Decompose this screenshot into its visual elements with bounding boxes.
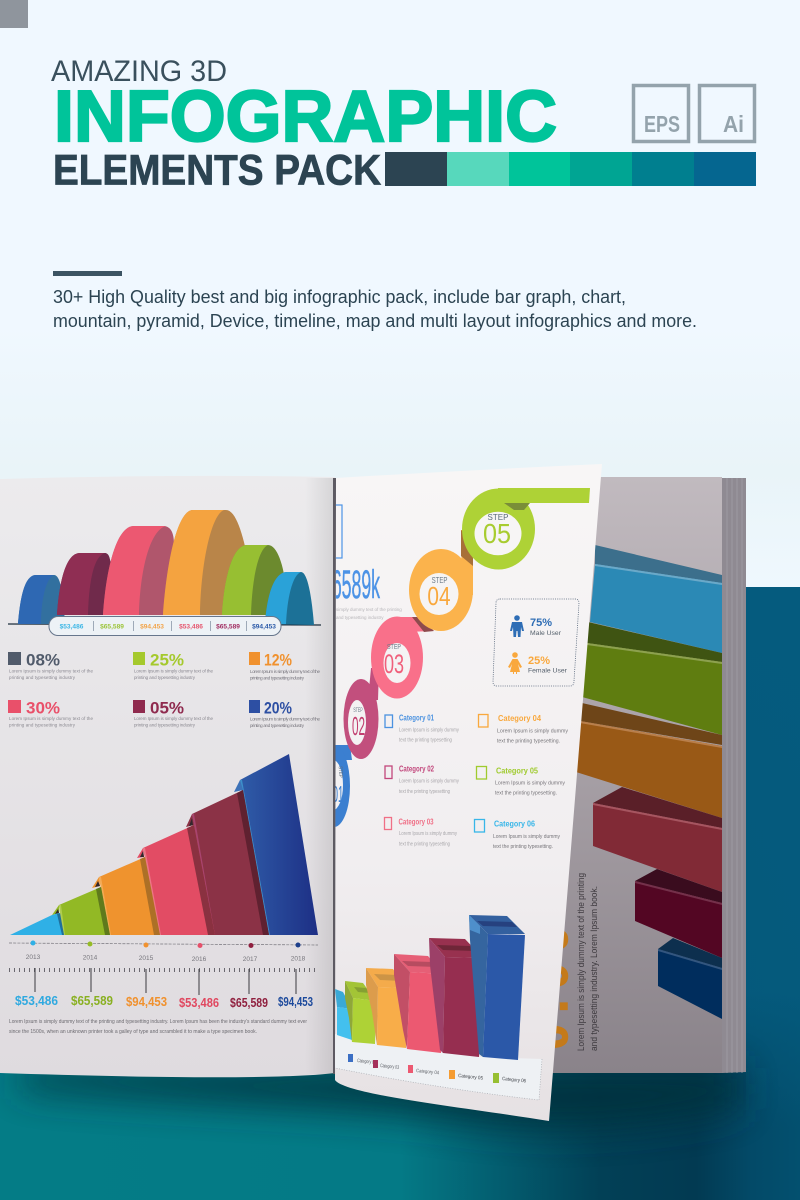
- intro text: mountain, pyramid, Device, timeline, map and multi layout infographics and more.: [53, 310, 697, 331]
- value pill: $94,453: [140, 624, 164, 630]
- stat: 25%: Lorem Ipsum is simply dummy text of the: [134, 668, 213, 674]
- band: navy: [658, 938, 722, 1019]
- male stat: 75%: [530, 617, 552, 629]
- category 04: [478, 714, 568, 744]
- female stat: [528, 656, 567, 672]
- step 05: STEP: [488, 513, 508, 522]
- book back page: [528, 477, 746, 1073]
- category 05: text the printing typesetting.: [495, 790, 557, 796]
- category 03: Category 03: [398, 818, 434, 826]
- year labels: 2015: [139, 955, 154, 962]
- stat: 12%: Lorem Ipsum is simply dummy text of the: [250, 669, 320, 674]
- stat grid: [8, 650, 320, 728]
- corner swatch: [0, 0, 28, 28]
- category 04: text the printing typesetting.: [497, 738, 560, 744]
- arch: blue: [18, 575, 65, 624]
- arch: pink: [103, 526, 174, 615]
- arch: maroon: [57, 553, 112, 615]
- female stat: 25%: [528, 655, 550, 667]
- stat: 20%: printing and typesetting industry: [250, 723, 305, 728]
- intro text: [53, 286, 697, 331]
- step 02: STEP: [353, 707, 363, 714]
- callout: 6589k: [336, 504, 402, 620]
- value row: $53,486: [179, 996, 219, 1010]
- value row: $53,486: [15, 994, 58, 1008]
- step 05: [462, 488, 590, 570]
- callout: 6589k: $6589k: [322, 563, 380, 607]
- ruler: [9, 968, 318, 995]
- legend item 02: [348, 1054, 373, 1064]
- user split panel: [493, 599, 579, 686]
- rotated caption: [576, 873, 599, 1051]
- stat: 25%: [133, 650, 213, 680]
- category 01: Category 01: [399, 714, 434, 722]
- step 03: [371, 616, 434, 698]
- bar: pink: [394, 954, 443, 1053]
- stat: 12%: printing and typesetting industry: [250, 676, 305, 680]
- right page flipping: [318, 464, 602, 1121]
- step 01: 01: [333, 781, 343, 807]
- arch: orange: [163, 510, 248, 615]
- legend item 03: Category 03: [380, 1063, 399, 1071]
- value row: $65,589: [71, 994, 113, 1008]
- category 03: [384, 818, 457, 848]
- icon: EPS file: EPS: [644, 111, 680, 137]
- band: blue: [590, 545, 722, 653]
- year labels: 2017: [243, 956, 258, 963]
- step 02: [344, 668, 379, 759]
- stat: 08%: Lorem Ipsum is simply dummy text of the: [9, 668, 93, 674]
- title line: elements pack: ELEMENTS PACK: [53, 146, 381, 194]
- category 03: text the printing typesetting: [399, 842, 450, 848]
- arch: cyan: [265, 572, 314, 625]
- accent rule: [53, 271, 122, 276]
- bar: cyan: [335, 989, 352, 1040]
- stat: 05%: printing and typesetting industry: [134, 722, 196, 728]
- baseline: [8, 624, 321, 625]
- legend item 02: Category 02: [357, 1058, 376, 1066]
- value pill: $53,486: [179, 624, 203, 630]
- step: cyan: [10, 913, 64, 935]
- body copy: [9, 1019, 307, 1035]
- body copy: since the 1500s, when an unknown printer took a galley of type and scrambled it to make a type specimen book.: [9, 1029, 257, 1035]
- rotated figure: 0.00: [528, 927, 577, 1049]
- page stack: [722, 478, 746, 1073]
- stat: 05%: [133, 698, 213, 728]
- category 05: [476, 766, 565, 796]
- category 06: text the printing typesetting.: [493, 844, 553, 850]
- callout: 6589k: and typesetting industry: [336, 615, 384, 620]
- category 02: Lorem Ipsum is simply dummy: [399, 778, 459, 784]
- category 03: Lorem Ipsum is simply dummy: [399, 831, 457, 837]
- category 02: Category 02: [399, 764, 434, 774]
- category 05: Lorem Ipsum is simply dummy: [495, 780, 565, 786]
- step 01: [335, 745, 352, 827]
- year labels: 2018: [291, 956, 306, 962]
- stat: 25%: 25%: [150, 650, 184, 670]
- value pill: $53,486: [60, 624, 84, 630]
- year labels: 2014: [83, 954, 98, 962]
- band: green: [582, 622, 722, 735]
- legend item 06: Category 06: [502, 1076, 526, 1085]
- band: red: [593, 787, 722, 892]
- title line: infographic: INFOGRAPHIC: [54, 77, 557, 157]
- category 01: text the printing typesetting: [399, 738, 452, 744]
- icon: male user: [510, 615, 524, 637]
- step 04: [409, 530, 473, 631]
- band: plum: [635, 869, 722, 958]
- timeline: [9, 940, 318, 963]
- value pill: [49, 616, 281, 636]
- value pill: $94,453: [252, 624, 276, 630]
- stair chart: [10, 754, 318, 935]
- arch: green: [222, 545, 286, 615]
- category 02: text the printing typesetting: [399, 789, 450, 795]
- bar: blue: [469, 915, 525, 1060]
- title line: amazing 3D: AMAZING 3D: [51, 55, 227, 88]
- stat: 20%: 20%: [264, 698, 292, 718]
- step 03: STEP: [387, 643, 401, 651]
- step 03: 03: [384, 648, 404, 679]
- category 06: Category 06: [494, 820, 535, 828]
- step 04: STEP: [432, 576, 448, 585]
- category 04: Category 04: [498, 714, 542, 723]
- step 04: 04: [427, 582, 451, 611]
- colour strip: [385, 152, 756, 186]
- stat: 25%: printing and typesetting industry: [134, 675, 196, 680]
- rotated caption: and typesetting industry. Lorem Ipsum book.: [589, 886, 599, 1051]
- legend item 04: Category 04: [416, 1068, 439, 1076]
- male stat: Male User: [530, 630, 562, 637]
- bar: maroon: [429, 938, 483, 1057]
- step: green: [52, 887, 110, 935]
- bar: green: [345, 981, 376, 1044]
- value row: $94,453: [278, 995, 313, 1009]
- step ribbon: [318, 488, 590, 827]
- band: orange: [576, 703, 722, 818]
- step: maroon: [186, 790, 269, 935]
- icon: EPS file: [634, 86, 688, 142]
- category 06: [474, 820, 560, 850]
- stat: 12%: [249, 650, 320, 680]
- category 01: Lorem Ipsum is simply dummy: [399, 728, 459, 734]
- stat: 08%: 08%: [26, 650, 60, 670]
- stat: 30%: 30%: [26, 698, 60, 718]
- rotated caption: Lorem Ipsum is simply dummy text of the printing: [576, 873, 586, 1051]
- step 01: STEP: [337, 766, 344, 778]
- step: pink: [137, 825, 215, 935]
- stat: 08%: printing and typesetting industry: [9, 675, 76, 680]
- female stat: Female User: [528, 668, 568, 674]
- category 05: Category 05: [496, 766, 539, 776]
- stat: 20%: Lorem Ipsum is simply dummy text of the: [250, 716, 320, 722]
- stat: 05%: 05%: [150, 698, 184, 718]
- arch chart: [8, 510, 321, 636]
- 3D bar chart: [335, 915, 525, 1060]
- icon: Ai file: Ai: [723, 111, 744, 137]
- year labels: [26, 954, 306, 963]
- year labels: 2013: [26, 954, 41, 961]
- category 01: [385, 714, 459, 744]
- value row: $94,453: [126, 995, 167, 1009]
- value pill: $65,589: [216, 624, 240, 630]
- stat: 08%: [8, 650, 93, 680]
- legend item 03: [373, 1060, 399, 1070]
- step: blue: [234, 754, 318, 935]
- stat: 20%: [249, 698, 320, 728]
- category 02: [385, 764, 459, 795]
- bar: orange: [366, 968, 407, 1048]
- category list: [384, 714, 568, 850]
- stat: 12%: 12%: [264, 650, 292, 670]
- left page: [0, 476, 336, 1077]
- intro text: 30+ High Quality best and big infographic pack, include bar graph, chart,: [53, 286, 626, 307]
- stat: 05%: Lorem Ipsum is simply dummy text of the: [134, 716, 213, 721]
- callout: 6589k: simply dummy text of the printing: [336, 607, 402, 612]
- category 04: Lorem Ipsum is simply dummy: [497, 728, 568, 734]
- legend item 06: [493, 1073, 526, 1083]
- male stat: [530, 618, 561, 635]
- category 06: Lorem Ipsum is simply dummy: [493, 834, 560, 840]
- legend panel: [335, 1034, 542, 1100]
- step: orange: [92, 857, 160, 935]
- icon: Ai file: [700, 86, 754, 142]
- value row: [15, 994, 313, 1010]
- stat: 30%: printing and typesetting industry: [9, 722, 76, 728]
- value pill: $65,589: [100, 624, 124, 630]
- legend item 05: Category 05: [458, 1073, 483, 1082]
- body copy: Lorem Ipsum is simply dummy text of the printing and typesetting industry. Lorem Ipsum has been the industry's standard dummy text ever: [9, 1019, 307, 1025]
- value row: $65,589: [230, 996, 268, 1010]
- title block: [51, 55, 557, 194]
- step 05: 05: [483, 518, 511, 549]
- step 02: 02: [352, 713, 365, 741]
- legend item 04: [408, 1065, 439, 1075]
- legend item 05: [449, 1070, 483, 1080]
- stat: 30%: Lorem Ipsum is simply dummy text of the: [9, 716, 93, 721]
- stat: 30%: [8, 698, 93, 728]
- year labels: 2016: [192, 956, 207, 963]
- icon: female user: [508, 652, 522, 674]
